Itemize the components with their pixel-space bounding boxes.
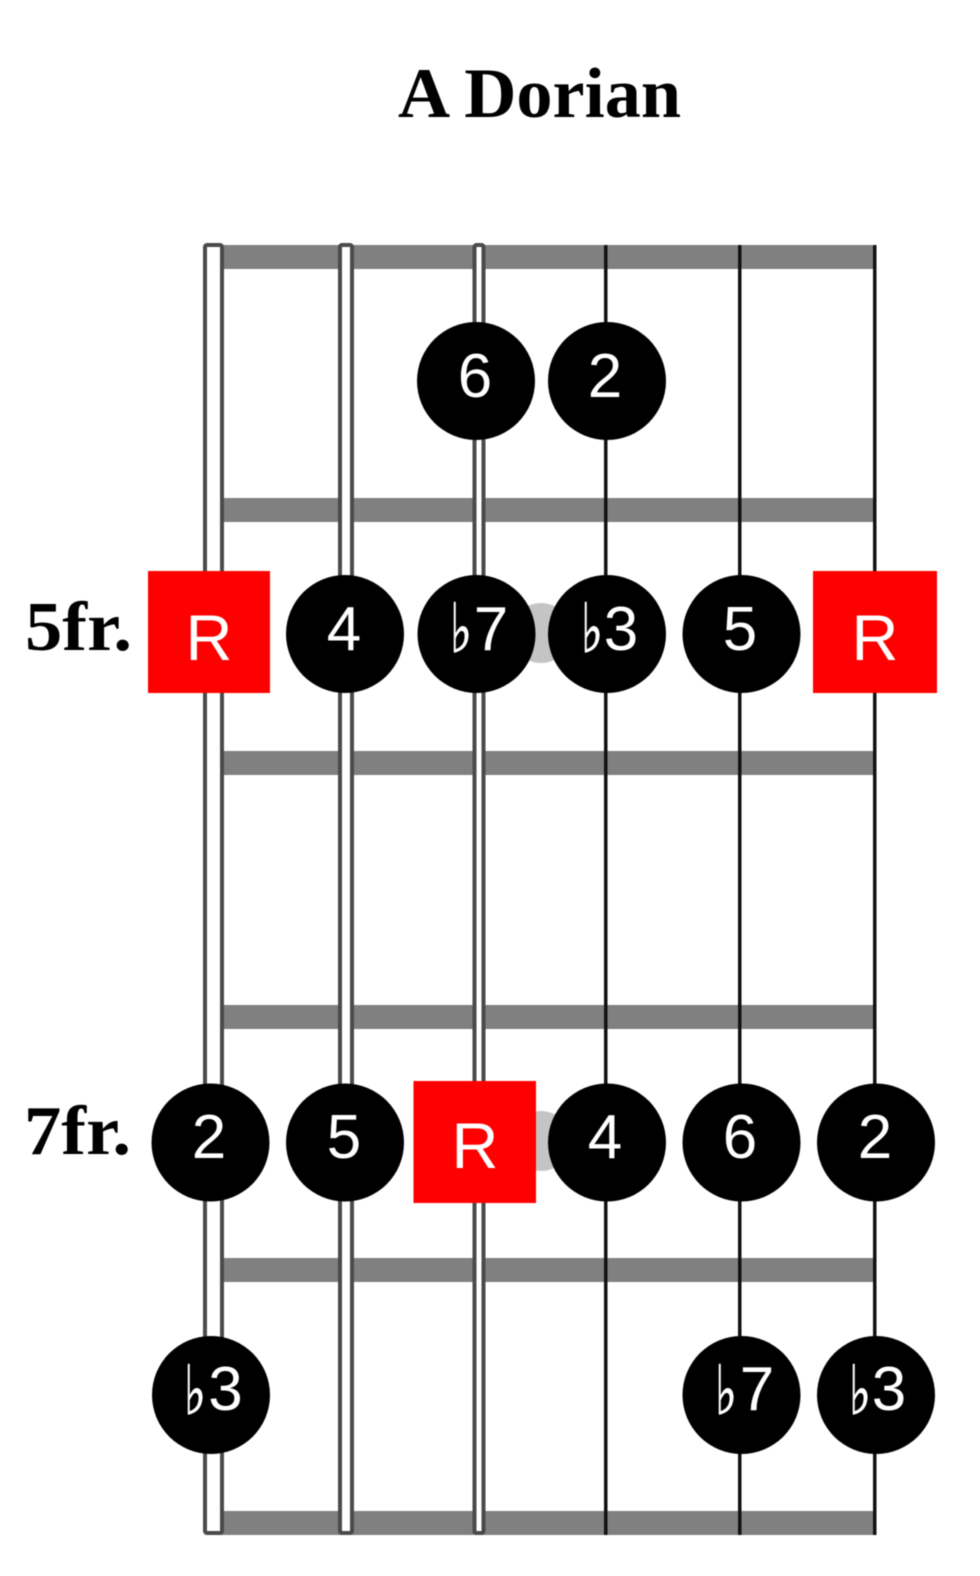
fret label: 5fr.: 5fr. bbox=[25, 589, 132, 666]
row 2 notes: ♭ bbox=[581, 590, 603, 669]
row 4 notes: ♭ bbox=[715, 1352, 737, 1431]
row 3 notes: 2 bbox=[192, 1103, 226, 1172]
row 2 notes: R bbox=[852, 601, 898, 674]
row 3 notes: 2 bbox=[858, 1103, 892, 1172]
row 1 notes: 2 bbox=[588, 342, 622, 411]
row 2 notes bbox=[148, 571, 937, 693]
row 4 notes: ♭ bbox=[849, 1352, 871, 1431]
row 2 notes: 5 bbox=[723, 595, 757, 664]
strings bbox=[205, 245, 876, 1535]
row 3 notes: 5 bbox=[327, 1103, 361, 1172]
row 3 notes: R bbox=[452, 1109, 498, 1182]
title: A Dorian bbox=[398, 55, 681, 133]
row 3 notes bbox=[152, 1081, 935, 1203]
fret label: 7fr.: 7fr. bbox=[24, 1093, 131, 1170]
row 4 notes: 7 bbox=[740, 1355, 774, 1424]
row 3 notes: 4 bbox=[588, 1103, 622, 1172]
row 1 notes: 6 bbox=[458, 342, 492, 411]
row 3 notes: 6 bbox=[723, 1103, 757, 1172]
row 4 notes: 3 bbox=[208, 1355, 243, 1424]
fretboard bbox=[205, 245, 876, 1535]
row 2 notes: 3 bbox=[604, 595, 638, 664]
row 2 notes: R bbox=[186, 601, 232, 674]
row 2 notes: 4 bbox=[327, 595, 361, 664]
fret marker dots bbox=[511, 603, 571, 1171]
row 2 notes: ♭ bbox=[450, 590, 472, 669]
row 2 notes: 7 bbox=[474, 595, 508, 664]
frets bbox=[216, 245, 875, 1535]
row 4 notes: 3 bbox=[872, 1355, 906, 1424]
row 4 notes bbox=[152, 1336, 935, 1454]
row 4 notes: ♭ bbox=[184, 1352, 206, 1431]
row 1 notes bbox=[417, 322, 666, 440]
